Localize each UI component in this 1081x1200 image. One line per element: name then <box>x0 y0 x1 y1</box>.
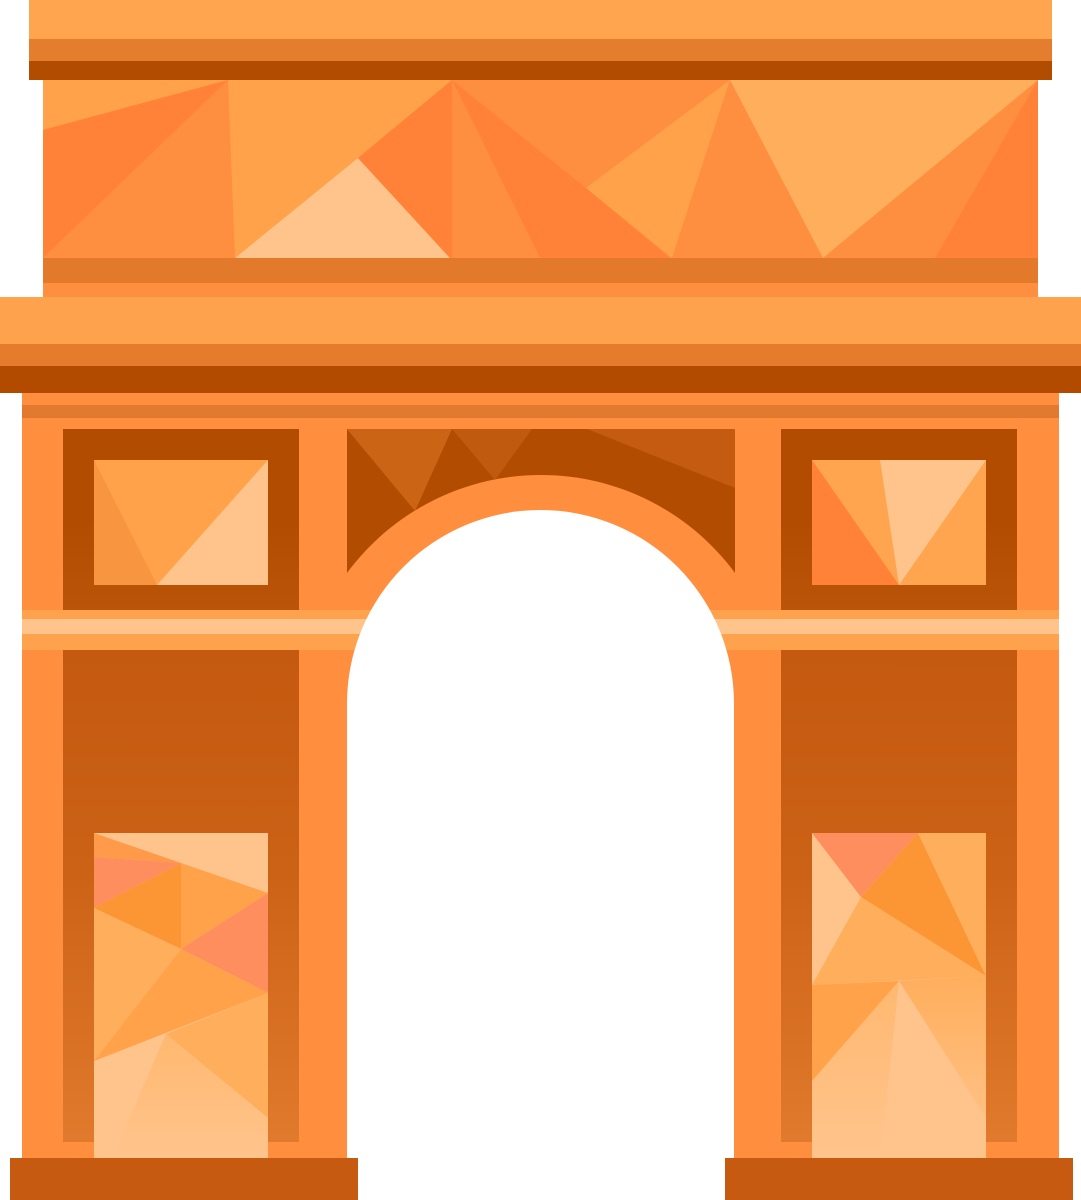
main body <box>22 393 1059 1158</box>
left upper window <box>63 429 299 610</box>
arch spandrel <box>347 429 735 573</box>
left plinth <box>10 1158 358 1200</box>
top cornice <box>29 0 1052 80</box>
right lower panel <box>781 650 1017 1158</box>
arch opening <box>347 510 734 1200</box>
left lower panel <box>63 650 299 1158</box>
attic block <box>43 80 1038 297</box>
right upper window <box>781 429 1017 610</box>
right plinth <box>725 1158 1073 1200</box>
middle cornice <box>0 297 1081 393</box>
decorative band <box>22 610 1059 650</box>
